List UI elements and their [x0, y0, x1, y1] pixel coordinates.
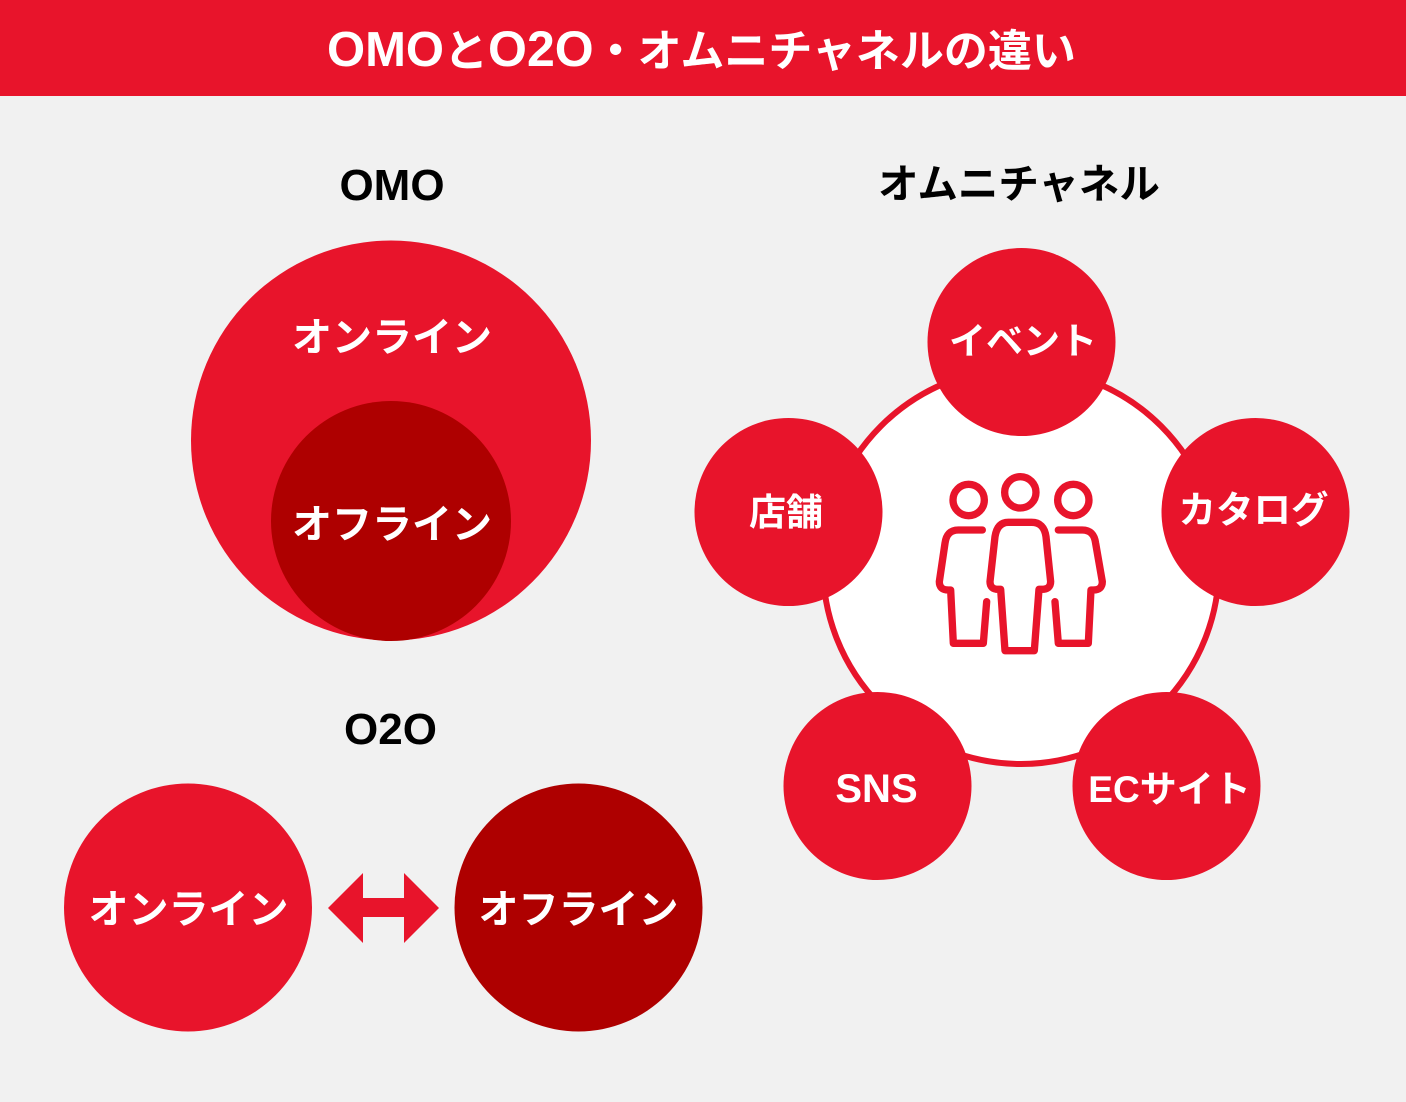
panel: OMO diagram: オンライン	[292, 316, 492, 360]
panel: omnichannel diagram	[694, 248, 1350, 880]
panel: O2O diagram	[64, 784, 702, 1032]
panel: omnichannel diagram: SNS	[835, 767, 918, 811]
heading: OMO: OMO	[339, 161, 445, 210]
title banner: OMOとO2O・オムニチャネルの違い	[327, 21, 1076, 77]
heading: O2O: O2O	[344, 705, 437, 754]
panel: omnichannel diagram: イベント	[949, 321, 1097, 362]
heading: omnichannel: オムニチャネル	[878, 161, 1160, 207]
panel: omnichannel diagram: カタログ	[1178, 489, 1328, 531]
panel: O2O diagram: オフライン	[478, 888, 678, 932]
panel: OMO diagram: オフライン	[292, 503, 492, 547]
panel: OMO diagram	[191, 240, 591, 641]
panel: omnichannel diagram: ECサイト	[1088, 769, 1251, 810]
title banner	[0, 0, 1406, 96]
panel: O2O diagram: オンライン	[88, 888, 288, 932]
panel: omnichannel diagram: 店舗	[749, 492, 823, 533]
